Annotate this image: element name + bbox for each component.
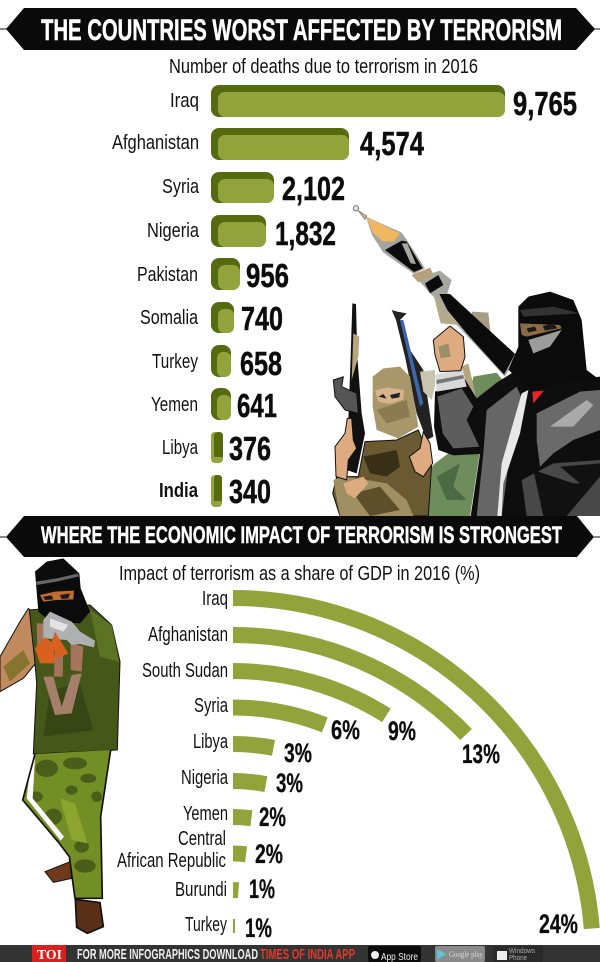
row: Turkey: Turkey — [152, 351, 198, 373]
row: Afghanistan: 13% — [462, 739, 500, 769]
row: India: 340 — [229, 473, 271, 510]
illustration: soldier aiming rifle — [0, 558, 120, 933]
row: Syria: 2,102 — [282, 170, 345, 207]
chart: GDP impact arcs — [117, 588, 592, 943]
row: Yemen — [151, 387, 277, 424]
row: Libya: 3% — [284, 738, 312, 768]
badge: Google play: Google play — [449, 950, 483, 959]
row: Somalia: 740 — [241, 300, 283, 337]
title banner: economic impact — [0, 516, 600, 557]
main fighter hood — [508, 292, 600, 390]
badge: Windows Phone — [493, 946, 543, 962]
row: Turkey: 1% — [245, 913, 272, 943]
badge: Windows Phone: Phone — [509, 955, 527, 962]
row: Somalia — [140, 300, 283, 337]
head — [35, 558, 90, 623]
row: Libya: 376 — [229, 430, 271, 467]
badge: Windows Phone: Windows — [509, 948, 535, 955]
row: Libya — [162, 430, 271, 467]
row: Nigeria: 1,832 — [275, 215, 336, 252]
row: India: India — [159, 480, 199, 502]
row: Iraq: 24% — [539, 909, 578, 939]
trousers — [23, 750, 111, 898]
row: Somalia: Somalia — [140, 307, 199, 329]
row: Nigeria — [147, 215, 336, 252]
row: Syria: Syria — [194, 695, 229, 717]
subtitle: GDP impact: Impact of terrorism as a share of GDP in 2016 (%) — [119, 563, 480, 585]
row: Yemen: Yemen — [183, 803, 228, 825]
row: Yemen — [183, 802, 286, 832]
chart: deaths by country — [112, 85, 577, 510]
glove hand — [35, 637, 55, 663]
row: Nigeria — [181, 767, 303, 798]
sling — [43, 673, 82, 715]
rifle left — [347, 303, 365, 473]
row: Turkey — [185, 913, 272, 943]
row: Burundi: 1% — [249, 874, 275, 904]
shoes — [45, 862, 72, 882]
row: Pakistan: Pakistan — [137, 264, 198, 286]
row: Iraq — [170, 85, 577, 122]
row: South Sudan: 9% — [388, 716, 416, 746]
brown fighter hood — [373, 367, 418, 438]
row: Afghanistan — [148, 624, 500, 769]
row: Libya: Libya — [193, 731, 229, 753]
row: Central African Republic: 2% — [255, 839, 283, 869]
badge: App Store — [368, 946, 421, 962]
row: Syria — [194, 695, 360, 745]
row: Libya — [193, 731, 312, 768]
torso — [29, 605, 120, 754]
row: Pakistan — [137, 257, 289, 294]
row: Syria: Syria — [162, 176, 200, 198]
row: Libya: Libya — [162, 437, 199, 459]
gun — [43, 612, 95, 647]
row: Iraq — [202, 588, 592, 939]
hands — [335, 418, 357, 480]
row: Syria: 6% — [331, 715, 360, 745]
RPG launcher — [353, 206, 517, 377]
row: Afghanistan: Afghanistan — [112, 132, 199, 154]
row: Iraq: Iraq — [202, 588, 228, 610]
bands on wrist — [435, 368, 467, 392]
illustration: group of armed fighters — [333, 206, 600, 516]
badge: Google play — [435, 946, 485, 962]
row: Turkey — [152, 345, 282, 382]
row: Afghanistan: Afghanistan — [148, 624, 228, 646]
row: Afghanistan — [112, 125, 424, 162]
row: South Sudan: South Sudan — [142, 660, 228, 682]
row: Afghanistan: 4,574 — [360, 125, 424, 162]
row: Nigeria: 3% — [276, 768, 303, 798]
row: India — [159, 473, 271, 510]
brown fighter body — [333, 430, 432, 516]
row: Central African Republic: African Republic — [117, 850, 226, 872]
row: Central African Republic — [117, 828, 283, 872]
subtitle: deaths: Number of deaths due to terrorism in 2016 — [169, 56, 478, 78]
main fighter robe — [434, 370, 600, 516]
row: Nigeria: Nigeria — [147, 220, 200, 242]
row: Syria — [162, 170, 345, 207]
green fighter behind — [468, 373, 503, 413]
row: Pakistan: 956 — [246, 257, 289, 294]
footer bar — [0, 945, 600, 962]
row: Iraq: Iraq — [170, 90, 199, 112]
row: South Sudan — [142, 660, 416, 746]
row: Nigeria: Nigeria — [181, 767, 229, 789]
row: Yemen: Yemen — [151, 394, 198, 416]
arm — [0, 608, 38, 692]
rifle middle — [392, 310, 433, 440]
row: Central African Republic: Central — [178, 828, 226, 850]
row: Turkey: Turkey — [185, 914, 227, 936]
row: Yemen: 2% — [259, 802, 286, 832]
row: Burundi: Burundi — [175, 879, 227, 901]
row: Iraq: 9,765 — [513, 85, 577, 122]
row: Yemen: 641 — [237, 387, 277, 424]
TOI logo — [32, 945, 66, 962]
raised fist — [433, 326, 465, 372]
row: Turkey: 658 — [240, 345, 282, 382]
row: Burundi — [175, 874, 275, 904]
